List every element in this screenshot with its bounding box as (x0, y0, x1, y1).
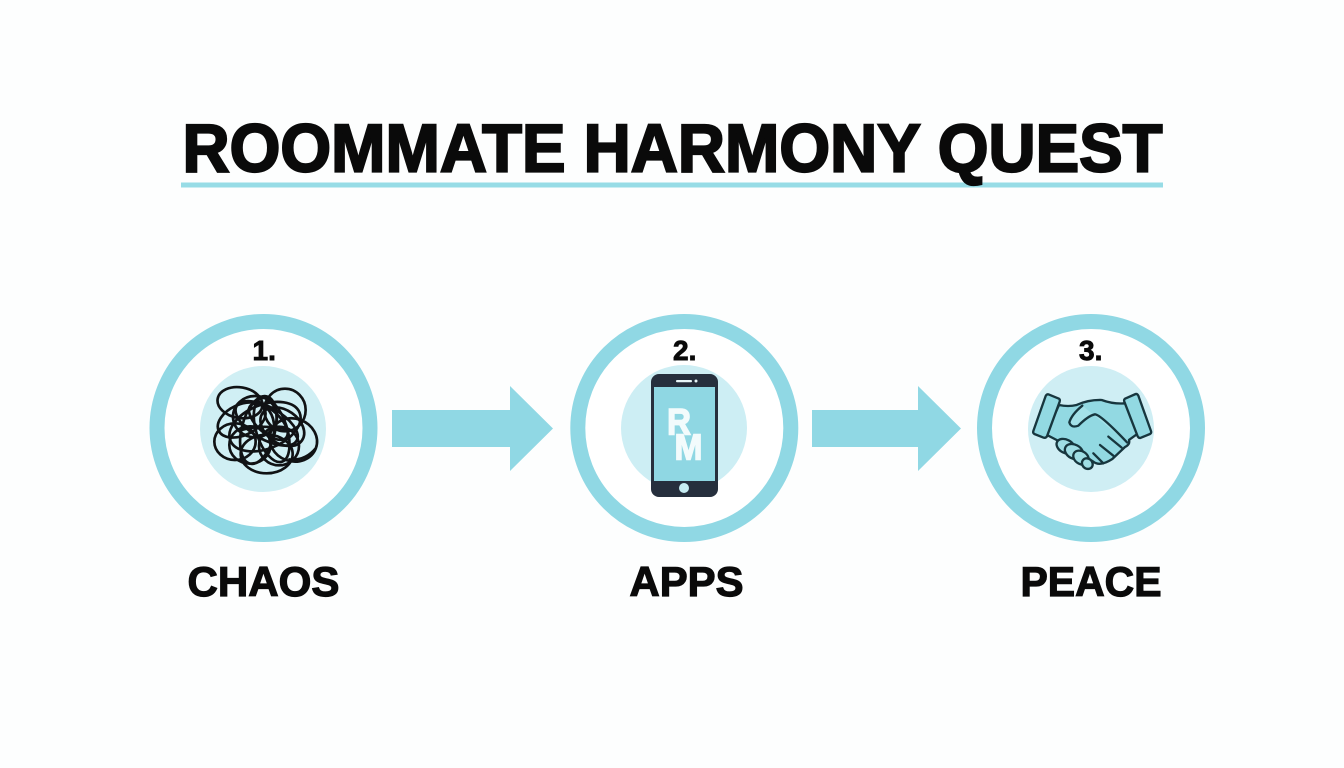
step 2: apps (578, 322, 791, 605)
label: apps: APPS (630, 558, 744, 605)
title: ROOMMATE HARMONY QUEST (182, 110, 1162, 186)
arrow 1 to 2 (392, 386, 553, 471)
ring 2 (578, 322, 791, 534)
phone logo RM: M (674, 426, 702, 468)
arrow 2 to 3 (812, 386, 961, 471)
inner disc 3 (1028, 366, 1154, 492)
label: peace: PEACE (1020, 558, 1162, 605)
ring 1 (157, 322, 370, 534)
step number 1: 1. (252, 335, 276, 366)
icon: handshake (1033, 394, 1151, 471)
title underline (181, 182, 1163, 188)
step 1: chaos (157, 322, 370, 605)
step 3: peace (984, 322, 1198, 605)
icon: tangled scribble (212, 384, 323, 473)
icon: smartphone (651, 374, 718, 497)
inner disc 1 (200, 366, 326, 492)
step number 3: 3. (1079, 335, 1102, 366)
ring 3 (984, 322, 1198, 534)
label: chaos: CHAOS (188, 558, 340, 605)
step number 2: 2. (673, 335, 696, 366)
inner disc 2 (621, 365, 747, 491)
phone logo RM: R (667, 402, 691, 442)
phone logo RM (667, 402, 702, 468)
